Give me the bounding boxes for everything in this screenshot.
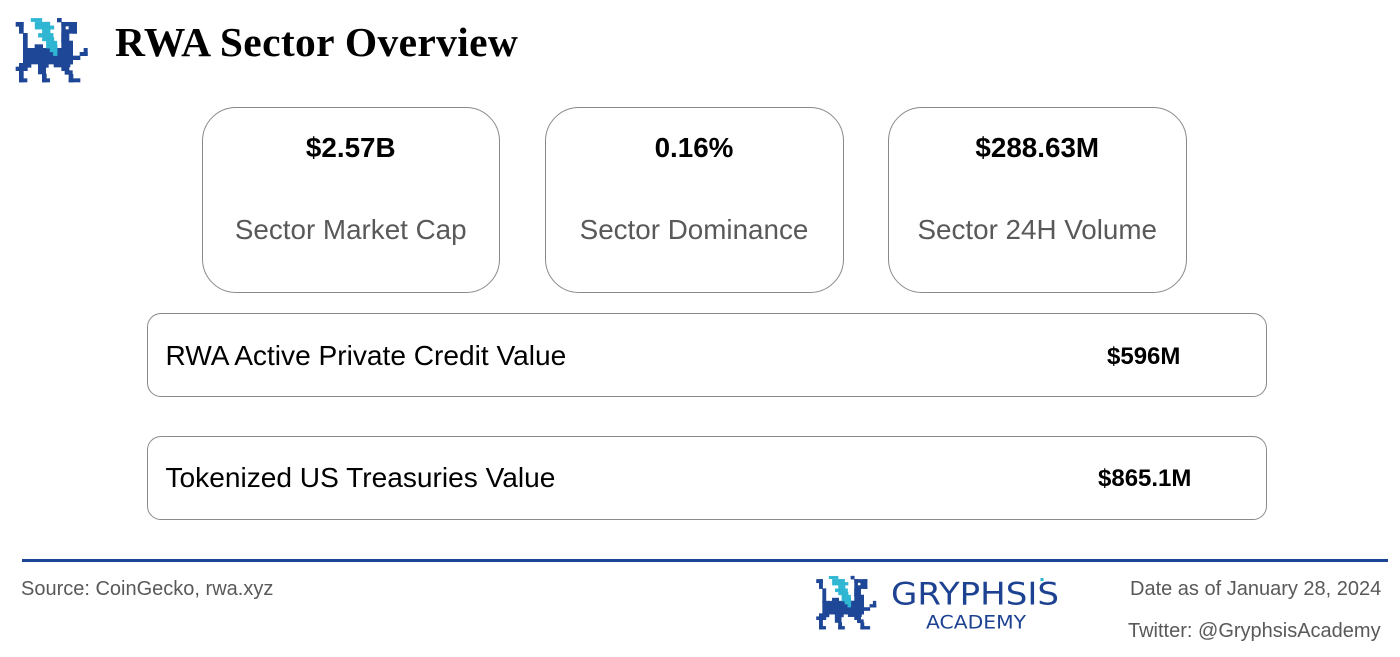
panel: sector market cap <box>202 106 500 292</box>
twitter text: Twitter: @GryphsisAcademy <box>1128 620 1381 642</box>
brand wordmark: ACADEMY <box>926 612 1027 634</box>
panel: tokenized treasuries value <box>146 436 1267 520</box>
source text: Source: CoinGecko, rwa.xyz <box>21 578 273 600</box>
panel: private credit value: RWA Active Private Credit Value <box>166 340 566 370</box>
panel: private credit value <box>146 313 1267 396</box>
panel: tokenized treasuries value: $865.1M <box>1098 465 1191 492</box>
panel: sector 24h volume: Sector 24H Volume <box>918 214 1157 245</box>
panel: sector 24h volume: $288.63M <box>975 132 1099 163</box>
panel: sector market cap: $2.57B <box>306 132 396 163</box>
brand wordmark: GRYPHSIS <box>891 576 1059 612</box>
brand wordmark <box>891 576 1059 634</box>
panel: private credit value: $596M <box>1107 342 1180 370</box>
panel: sector 24h volume <box>888 106 1186 292</box>
date text: Date as of January 28, 2024 <box>1130 578 1381 600</box>
icon: gryphon logo header <box>16 18 88 82</box>
panel: sector dominance: Sector Dominance <box>580 214 808 245</box>
panel: tokenized treasuries value: Tokenized US Treasuries Value <box>166 462 555 493</box>
icon: gryphon logo footer <box>816 576 876 630</box>
panel: sector dominance: 0.16% <box>655 132 733 163</box>
panel: sector market cap: Sector Market Cap <box>235 214 467 245</box>
panel: sector dominance <box>544 106 844 292</box>
title: RWA Sector Overview <box>115 19 518 65</box>
